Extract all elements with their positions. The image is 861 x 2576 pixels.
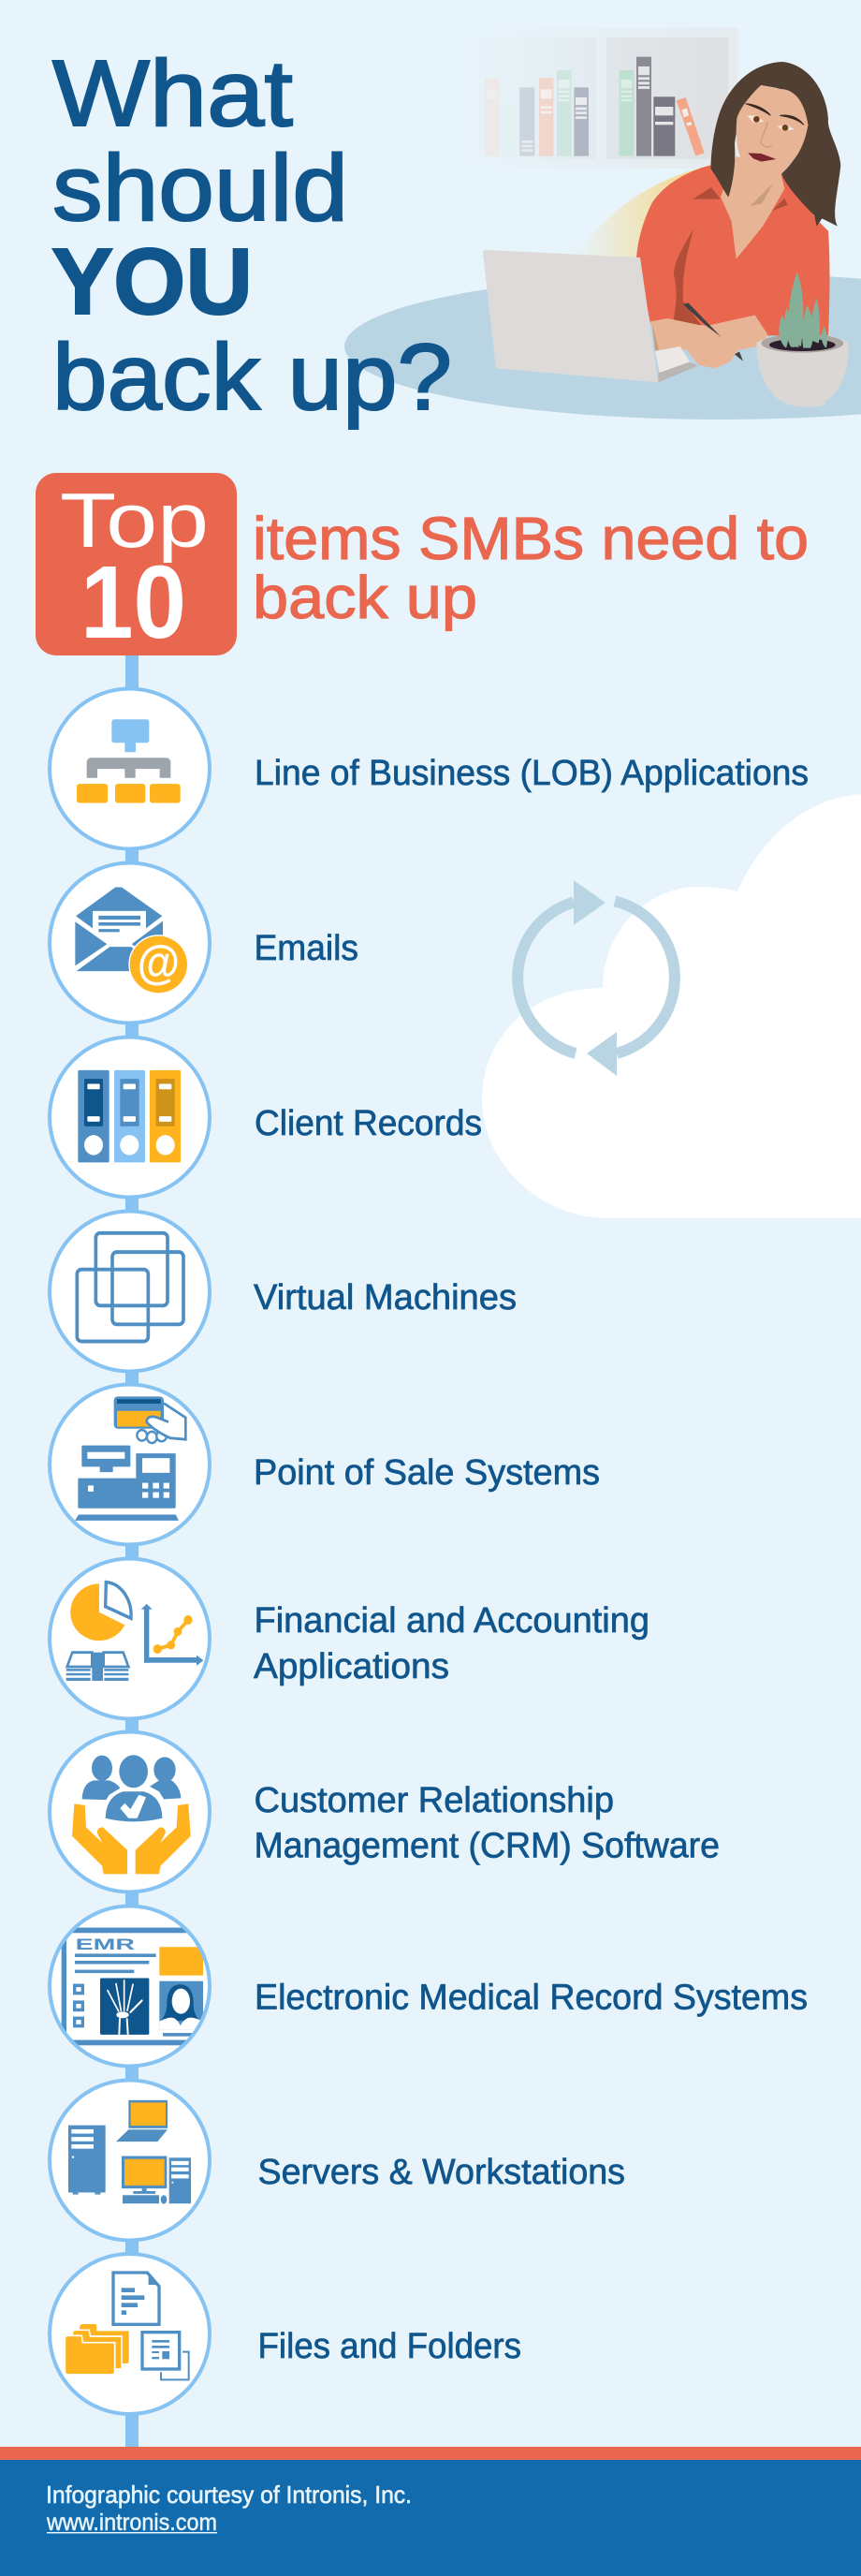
circle [50, 1732, 210, 1892]
label: Electronic Medical Record Systems [255, 1978, 808, 2017]
item 3: Client Records [50, 1038, 482, 1197]
label: Files and Folders [258, 2327, 521, 2366]
circle [50, 863, 210, 1023]
label: Virtual Machines [254, 1278, 517, 1317]
footer [0, 2447, 861, 2576]
title: YOU [51, 229, 253, 334]
item 2: Emails [50, 863, 358, 1023]
website link text: www.intronis.com [46, 2510, 217, 2536]
icon: pie chart, graph and money [66, 1582, 203, 1681]
illustration: woman at laptop [344, 28, 861, 420]
item 5: Point of Sale Systems [50, 1384, 600, 1545]
icon: binders [78, 1070, 181, 1162]
label: Point of Sale Systems [254, 1453, 600, 1493]
label: Financial and Accounting [255, 1601, 649, 1641]
icon: EMR record: EMR [76, 1936, 136, 1953]
circle [50, 689, 210, 848]
timeline connector [125, 655, 139, 2449]
label: Servers & Workstations [258, 2153, 625, 2192]
item 1: Line of Business Applications [50, 689, 809, 848]
label: Client Records [255, 1104, 482, 1143]
cloud [482, 794, 861, 1218]
heading badge: Top 10: 10 [80, 545, 186, 660]
label: Line of Business (LOB) Applications [255, 754, 809, 793]
icon: org chart [77, 719, 181, 802]
icon: envelope with at sign: @ [138, 936, 180, 989]
title [51, 41, 452, 430]
label: Emails [255, 929, 358, 968]
label: Management (CRM) Software [255, 1826, 720, 1865]
link underline [47, 2532, 217, 2534]
footer accent stripe [0, 2447, 861, 2460]
circle [50, 1558, 210, 1719]
item 7: Customer Relationship Management Software [50, 1732, 720, 1892]
label: Customer Relationship [255, 1781, 614, 1820]
table [344, 273, 861, 420]
circle [50, 2254, 210, 2414]
label [254, 1601, 649, 1686]
circle [50, 1384, 210, 1545]
circle outline [50, 1906, 210, 2066]
item 8: Electronic Medical Record Systems [47, 1906, 808, 2066]
icon: overlapping windows [77, 1233, 183, 1341]
subheading: items SMBs need to [253, 505, 809, 572]
bookshelf [468, 28, 737, 169]
item 9: Servers & Workstations [50, 2081, 625, 2240]
icon: files and folders [65, 2273, 189, 2379]
subheading: back up [253, 564, 477, 631]
heading badge: Top 10 [36, 473, 237, 660]
item 10: Files and Folders [50, 2254, 521, 2414]
title: should [52, 136, 348, 241]
icon: EMR record [62, 1927, 203, 2045]
label [255, 1781, 720, 1865]
circle [50, 1212, 210, 1371]
circle [50, 1038, 210, 1197]
icon: people in hands [72, 1755, 191, 1874]
label: Applications [254, 1647, 449, 1686]
credit text: Infographic courtesy of Intronis, Inc. [46, 2480, 412, 2509]
title: back up? [52, 325, 452, 430]
subheading [253, 505, 809, 631]
woman and desk items [483, 62, 849, 407]
icon: sync arrows [518, 880, 675, 1076]
footer panel [0, 2460, 861, 2576]
icon: cash register and card [75, 1396, 185, 1521]
circle [50, 2081, 210, 2240]
item 4: Virtual Machines [50, 1212, 517, 1371]
title: What [52, 41, 293, 146]
icon: envelope with at sign [75, 887, 187, 993]
heading badge: Top 10: Top [60, 477, 209, 564]
circle [50, 1906, 210, 2066]
item 6: Financial and Accounting Applications [50, 1558, 649, 1719]
icon: server, laptop and desktop [68, 2100, 191, 2204]
